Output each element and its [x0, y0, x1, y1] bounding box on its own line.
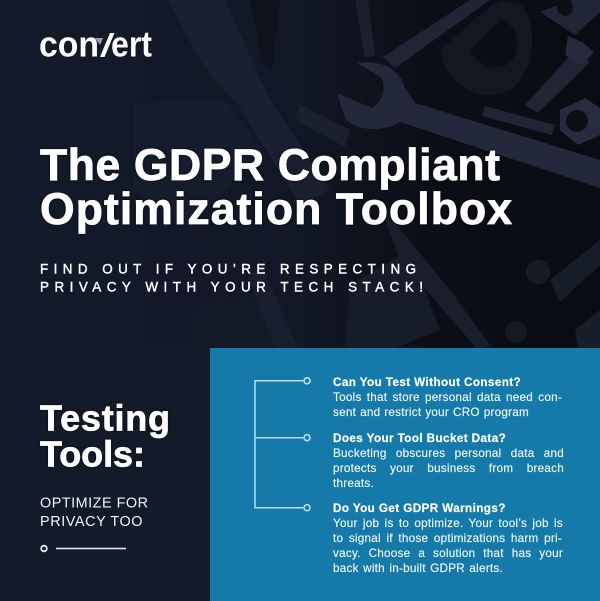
text block: do you get gdpr warnings: Do You Get GDPR Warnings?: [333, 502, 506, 515]
text block: does your tool bucket data: protects your business from breach: [333, 462, 564, 475]
marker: circle and line: [40, 544, 126, 552]
panel: testing tools sidebar: [0, 348, 210, 601]
subtitle: FIND OUT IF YOU’RE RESPECTING: [40, 261, 416, 276]
heading: testing tools: [40, 398, 170, 475]
text block: do you get gdpr warnings: back with in-built GDPR alerts.: [333, 562, 503, 575]
text block: does your tool bucket data: Does Your Tool Bucket Data?: [333, 432, 506, 445]
subtitle: [40, 261, 423, 295]
logo: convert: [39, 24, 152, 64]
subheading: optimize for privacy too: OPTIMIZE FOR: [40, 496, 148, 512]
text block: does your tool bucket data: threats.: [333, 477, 374, 490]
panel: hero toolbox photo background: [250, 0, 600, 348]
heading: testing tools: Tools:: [40, 434, 145, 475]
text block: do you get gdpr warnings: to signal if those optimizations harm pri-: [333, 532, 562, 545]
subheading: optimize for privacy too: [40, 496, 148, 530]
title: Optimization Toolbox: [40, 185, 512, 234]
title: The GDPR Compliant: [40, 141, 500, 190]
text block: can you test without consent: Tools that store personal data need con-: [333, 391, 562, 404]
text block: do you get gdpr warnings: Your job is to optimize. Your tool’s job is: [333, 517, 563, 530]
text block: does your tool bucket data: Bucketing obscures personal data and: [333, 447, 564, 460]
icon: caliper, bolts and nuts: [295, 0, 600, 348]
text block: can you test without consent: sent and restrict your CRO program: [333, 406, 529, 419]
subtitle: PRIVACY WITH YOUR TECH STACK!: [40, 280, 423, 295]
logo: convert: con: [39, 24, 99, 64]
text block: do you get gdpr warnings: [333, 502, 563, 575]
subheading: optimize for privacy too: PRIVACY TOO: [40, 514, 142, 530]
text block: can you test without consent: [333, 376, 562, 419]
icon: pliers and long tool handle: [134, 0, 490, 390]
connector: bracket with three nodes: [254, 377, 311, 512]
icon: open-end wrench: [337, 0, 600, 188]
logo: convert: ert: [111, 24, 152, 64]
heading: testing tools: Testing: [40, 398, 170, 439]
text block: does your tool bucket data: [333, 432, 564, 490]
title: [40, 141, 512, 234]
text block: can you test without consent: Can You Test Without Consent?: [333, 376, 521, 389]
text block: do you get gdpr warnings: vacy. Choose a solution that has your: [333, 547, 563, 560]
panel: blue questions panel: [210, 348, 600, 601]
